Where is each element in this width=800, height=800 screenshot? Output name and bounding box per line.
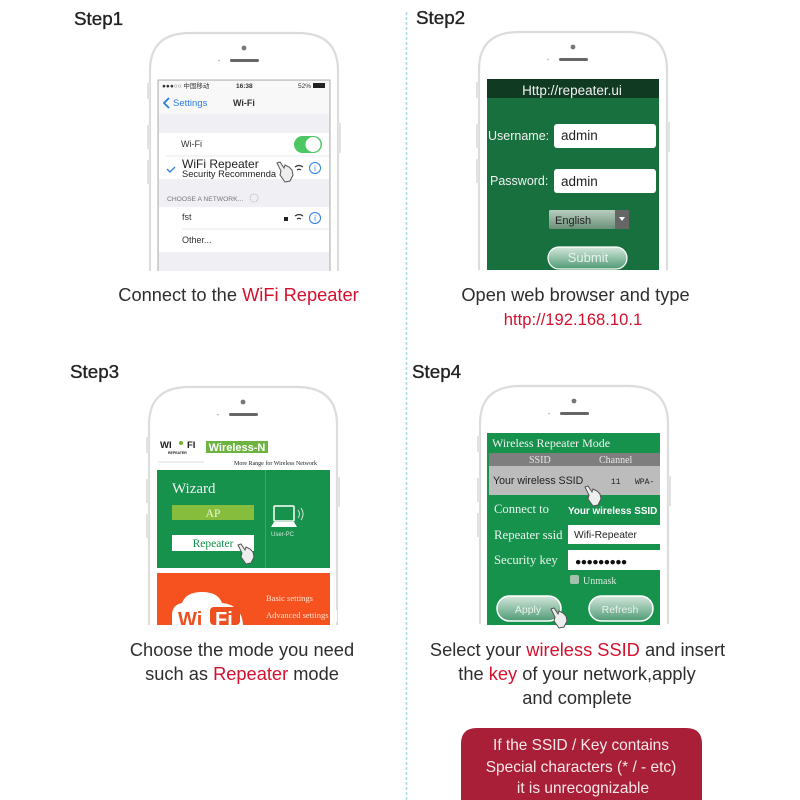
phone: step 4 repeater mode: Wireless Repeater Mode [492, 436, 610, 450]
selected network: i [314, 164, 316, 173]
phone: step 4 repeater mode: SSID [529, 455, 551, 466]
nav bar [164, 98, 255, 109]
apply button [497, 596, 567, 628]
phone: step 3 wizard: More Range for Wireless Network [234, 460, 317, 467]
caption: step 4: and complete [522, 687, 632, 708]
phone: step 1 Wi-Fi settings: Wi-Fi [181, 139, 202, 149]
language select [549, 210, 629, 229]
callout: special characters warning [461, 728, 702, 800]
network list: Other... [182, 235, 212, 245]
phone: step 3 wizard: Wizard [172, 481, 216, 497]
phone: step 4 repeater mode: Repeater ssid [494, 528, 563, 542]
laptop icon [271, 506, 303, 538]
selected network [167, 157, 320, 182]
Repeater button: Repeater [193, 538, 234, 550]
caption: step 2 [461, 284, 690, 329]
WiFi cloud logo: Fi [215, 609, 233, 631]
phone: step 4 repeater mode: Channel [599, 455, 633, 466]
language select: English [555, 215, 591, 227]
heading: Step1: Step1 [74, 8, 123, 29]
phone: step 2 login page: Http://repeater.ui [522, 83, 622, 98]
submit button: Submit [568, 250, 609, 265]
caption: step 4 [430, 639, 725, 708]
phone: step 3 wizard: Advanced settings [266, 610, 329, 620]
callout: special characters warning: it is unrecognizable [517, 780, 649, 797]
status bar: ●●●○○ 中国移动 [162, 81, 210, 90]
Repeater button [172, 535, 254, 564]
phone: step 1 Wi-Fi settings [147, 33, 341, 271]
network list [182, 212, 320, 245]
network list: i [314, 214, 316, 223]
phone: step 4 repeater mode: Your wireless SSID [493, 475, 584, 487]
phone: step 4 repeater mode: Security key [494, 553, 558, 567]
AP button [172, 505, 254, 520]
AP button: AP [206, 508, 220, 520]
phone: step 3 wizard [146, 387, 340, 631]
refresh button [589, 596, 653, 621]
unmask checkbox: Unmask [583, 576, 616, 587]
caption: step 4: Select your wireless SSID and insert [430, 639, 725, 660]
WiFi cloud logo: Wi [178, 609, 202, 631]
phone: step 2 login page: admin [561, 174, 598, 189]
status bar: 52% [298, 83, 311, 90]
callout: special characters warning: Special characters (* / - etc) [486, 759, 676, 776]
phone: step 1 Wi-Fi settings: CHOOSE A NETWORK... [167, 196, 243, 203]
logo: FI [187, 440, 195, 451]
apply button: Apply [515, 604, 542, 616]
heading: Step3: Step3 [70, 361, 119, 382]
phone: step 2 login page: Password: [490, 174, 548, 188]
heading: Step2: Step2 [416, 7, 465, 28]
phone: step 2 login page: admin [561, 128, 598, 143]
refresh button: Refresh [602, 604, 639, 616]
phone: step 2 login page [476, 32, 670, 270]
logo [160, 440, 195, 455]
laptop icon: User-PC [271, 532, 295, 538]
WiFi cloud logo [172, 592, 243, 631]
phone: step 4 repeater mode: Connect to [494, 502, 549, 516]
logo: WI [160, 440, 172, 451]
phone: step 4 repeater mode: Your wireless SSID [568, 506, 657, 517]
unmask checkbox [570, 575, 616, 587]
heading: Step4: Step4 [412, 361, 461, 382]
caption: step 2: Open web browser and type [461, 284, 690, 305]
dashed divider [406, 12, 408, 800]
caption: step 2: http://192.168.10.1 [504, 310, 642, 329]
phone: step 4 repeater mode: ●●●●●●●●● [575, 556, 627, 568]
phone: step 2 login page: Username: [488, 129, 549, 143]
toggle [294, 136, 322, 153]
network list: fst [182, 212, 192, 222]
status bar: 16:38 [236, 83, 253, 90]
caption: step 3: Choose the mode you need [130, 639, 354, 660]
selected network: Security Recommenda [182, 169, 277, 179]
caption: step 4: the key of your network,apply [458, 663, 697, 684]
submit button [548, 247, 627, 269]
Wireless-N badge: Wireless-N [209, 442, 265, 454]
phone: step 3 wizard: Basic settings [266, 593, 313, 603]
caption: step 1: Connect to the WiFi Repeater [118, 284, 359, 305]
status bar [162, 81, 325, 90]
selected network: WiFi Repeater [182, 157, 259, 171]
caption: step 3 [130, 639, 354, 684]
caption: step 3: such as Repeater mode [145, 663, 339, 684]
callout: special characters warning: If the SSID / Key contains [493, 737, 669, 754]
phone: step 4 repeater mode: WPA- [635, 478, 654, 487]
nav bar: Settings [173, 98, 208, 109]
phone: step 4 repeater mode [477, 386, 671, 628]
phone: step 4 repeater mode: 11 [611, 478, 621, 487]
logo: REPEATER [168, 451, 187, 455]
nav bar: Wi-Fi [233, 98, 255, 108]
phone: step 4 repeater mode: Wifi-Repeater [574, 530, 638, 541]
